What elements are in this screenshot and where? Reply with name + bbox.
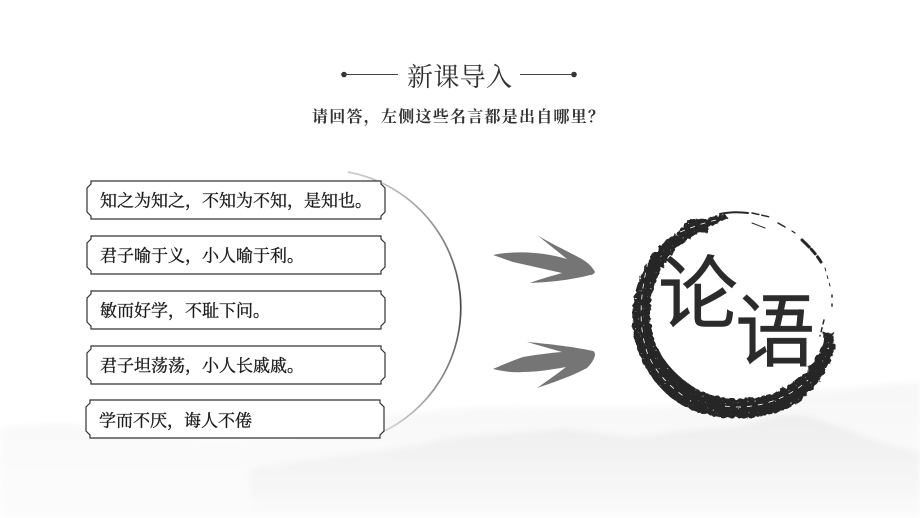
ring dashes top right xyxy=(720,212,832,336)
quote box 4: 君子坦荡荡，小人长戚戚。 xyxy=(100,352,304,376)
quote box 4 xyxy=(87,346,385,384)
title ornament right xyxy=(520,72,577,77)
quote box 2 xyxy=(87,236,385,274)
arrow: upper brush xyxy=(493,235,595,283)
quote box 1 xyxy=(87,181,385,219)
background: ink mountains xyxy=(0,381,920,518)
arrow: lower brush xyxy=(493,342,595,388)
quote box 1: 知之为知之，不知为不知，是知也。 xyxy=(100,186,372,212)
title ornament left xyxy=(341,72,398,77)
quote box 3 xyxy=(87,291,385,329)
论 character: 论 xyxy=(658,230,738,346)
ring dry-brush streaks xyxy=(641,219,808,407)
title xyxy=(341,57,577,94)
quote box 5 xyxy=(86,400,384,438)
ink ring xyxy=(632,212,836,418)
curved arc xyxy=(348,172,461,435)
subtitle question: 请回答，左侧这些名言都是出自哪里？ xyxy=(312,104,604,127)
title text: 新课导入 xyxy=(407,57,512,94)
quote box 3: 敏而好学，不耻下问。 xyxy=(100,296,270,322)
brush ring with 论语 xyxy=(632,212,836,418)
语 character: 语 xyxy=(735,268,815,384)
quote box 2: 君子喻于义，小人喻于利。 xyxy=(100,242,304,266)
quote box 5: 学而不厌，诲人不倦 xyxy=(99,406,252,432)
quote list xyxy=(86,181,385,438)
